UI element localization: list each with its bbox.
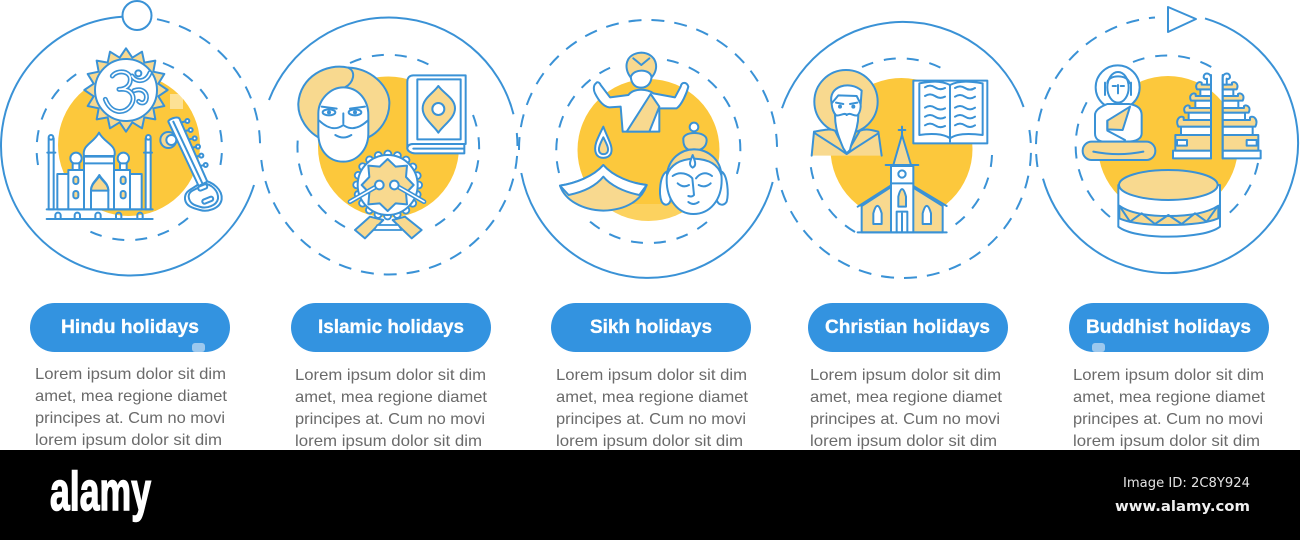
text block: Buddhist description: amet, mea regione diamet	[1073, 389, 1266, 406]
text block: Christian description: lorem ipsum dolor sit dim	[810, 433, 997, 450]
icon: diya oil lamp	[560, 127, 647, 211]
text block: Hindu description: lorem ipsum dolor sit dim	[35, 432, 222, 449]
text block: Sikh description: amet, mea regione diamet	[556, 389, 749, 406]
website: www.alamy.com	[1115, 499, 1250, 515]
text block: Buddhist description: Lorem ipsum dolor sit dim	[1073, 367, 1264, 384]
text block: Sikh description: principes at. Cum no movi	[556, 411, 746, 428]
pill: Sikh holidays	[551, 303, 751, 352]
pill: Buddhist holidays: Buddhist holidays	[1086, 317, 1251, 338]
text block: Islamic description: Lorem ipsum dolor sit dim	[295, 367, 486, 384]
text block: Sikh description: lorem ipsum dolor sit dim	[556, 433, 743, 450]
pill: Islamic holidays: Islamic holidays	[318, 317, 464, 338]
icon: holy book	[407, 75, 466, 153]
pill: Christian holidays: Christian holidays	[825, 317, 990, 338]
panel: Hindu holidays circle	[1, 1, 260, 276]
panel: Sikh holidays circle	[519, 20, 777, 278]
text block: Islamic description: amet, mea regione diamet	[295, 389, 488, 406]
icon: saint with halo	[812, 70, 882, 156]
text block: Hindu description: principes at. Cum no movi	[35, 410, 225, 427]
icon: guru with turban	[594, 53, 688, 132]
panel: Christian holidays circle	[776, 22, 1031, 278]
text block: Islamic description	[295, 367, 488, 450]
pill: Buddhist holidays	[1069, 303, 1269, 352]
text block: Hindu description	[35, 366, 228, 449]
image id: Image ID: 2C8Y924	[1123, 476, 1250, 491]
footer band	[0, 450, 1300, 540]
icon: sitar	[160, 118, 222, 211]
text block: Buddhist description: principes at. Cum no movi	[1073, 411, 1263, 428]
icon: drum	[1118, 170, 1220, 237]
text block: Christian description: amet, mea regione diamet	[810, 389, 1003, 406]
pill: Sikh holidays: Sikh holidays	[590, 317, 712, 338]
icon: Taj Mahal	[47, 133, 153, 219]
icon: turbaned man	[298, 67, 389, 162]
text block: Sikh description: Lorem ipsum dolor sit dim	[556, 367, 747, 384]
text block: Christian description: principes at. Cum no movi	[810, 411, 1000, 428]
text block: Christian description: Lorem ipsum dolor sit dim	[810, 367, 1001, 384]
text block: Islamic description: principes at. Cum no movi	[295, 411, 485, 428]
text block: Buddhist description: lorem ipsum dolor sit dim	[1073, 433, 1260, 450]
text block: Hindu description: Lorem ipsum dolor sit dim	[35, 366, 226, 383]
icon: drum with sticks	[350, 154, 424, 238]
text block: Buddhist description	[1073, 367, 1266, 450]
text block: Sikh description	[556, 367, 749, 450]
icon: temple gate	[1173, 73, 1261, 158]
pill: Christian holidays	[808, 303, 1008, 352]
pill: Hindu holidays	[30, 303, 230, 352]
icon: om symbol in sun	[84, 48, 168, 132]
alamy logo: alamy	[50, 460, 151, 522]
pill: Islamic holidays	[291, 303, 491, 352]
panel: Buddhist holidays circle	[1036, 7, 1298, 273]
text block: Hindu description: amet, mea regione diamet	[35, 388, 228, 405]
text block: Christian description	[810, 367, 1003, 450]
icon: Buddha head	[660, 123, 728, 214]
pill: Hindu holidays: Hindu holidays	[61, 317, 199, 338]
panel: Islamic holidays circle	[261, 17, 517, 275]
icon: open bible	[913, 81, 987, 143]
icon: seated Buddha	[1083, 65, 1155, 160]
text block: Islamic description: lorem ipsum dolor sit dim	[295, 433, 482, 450]
icon: church	[858, 127, 947, 232]
